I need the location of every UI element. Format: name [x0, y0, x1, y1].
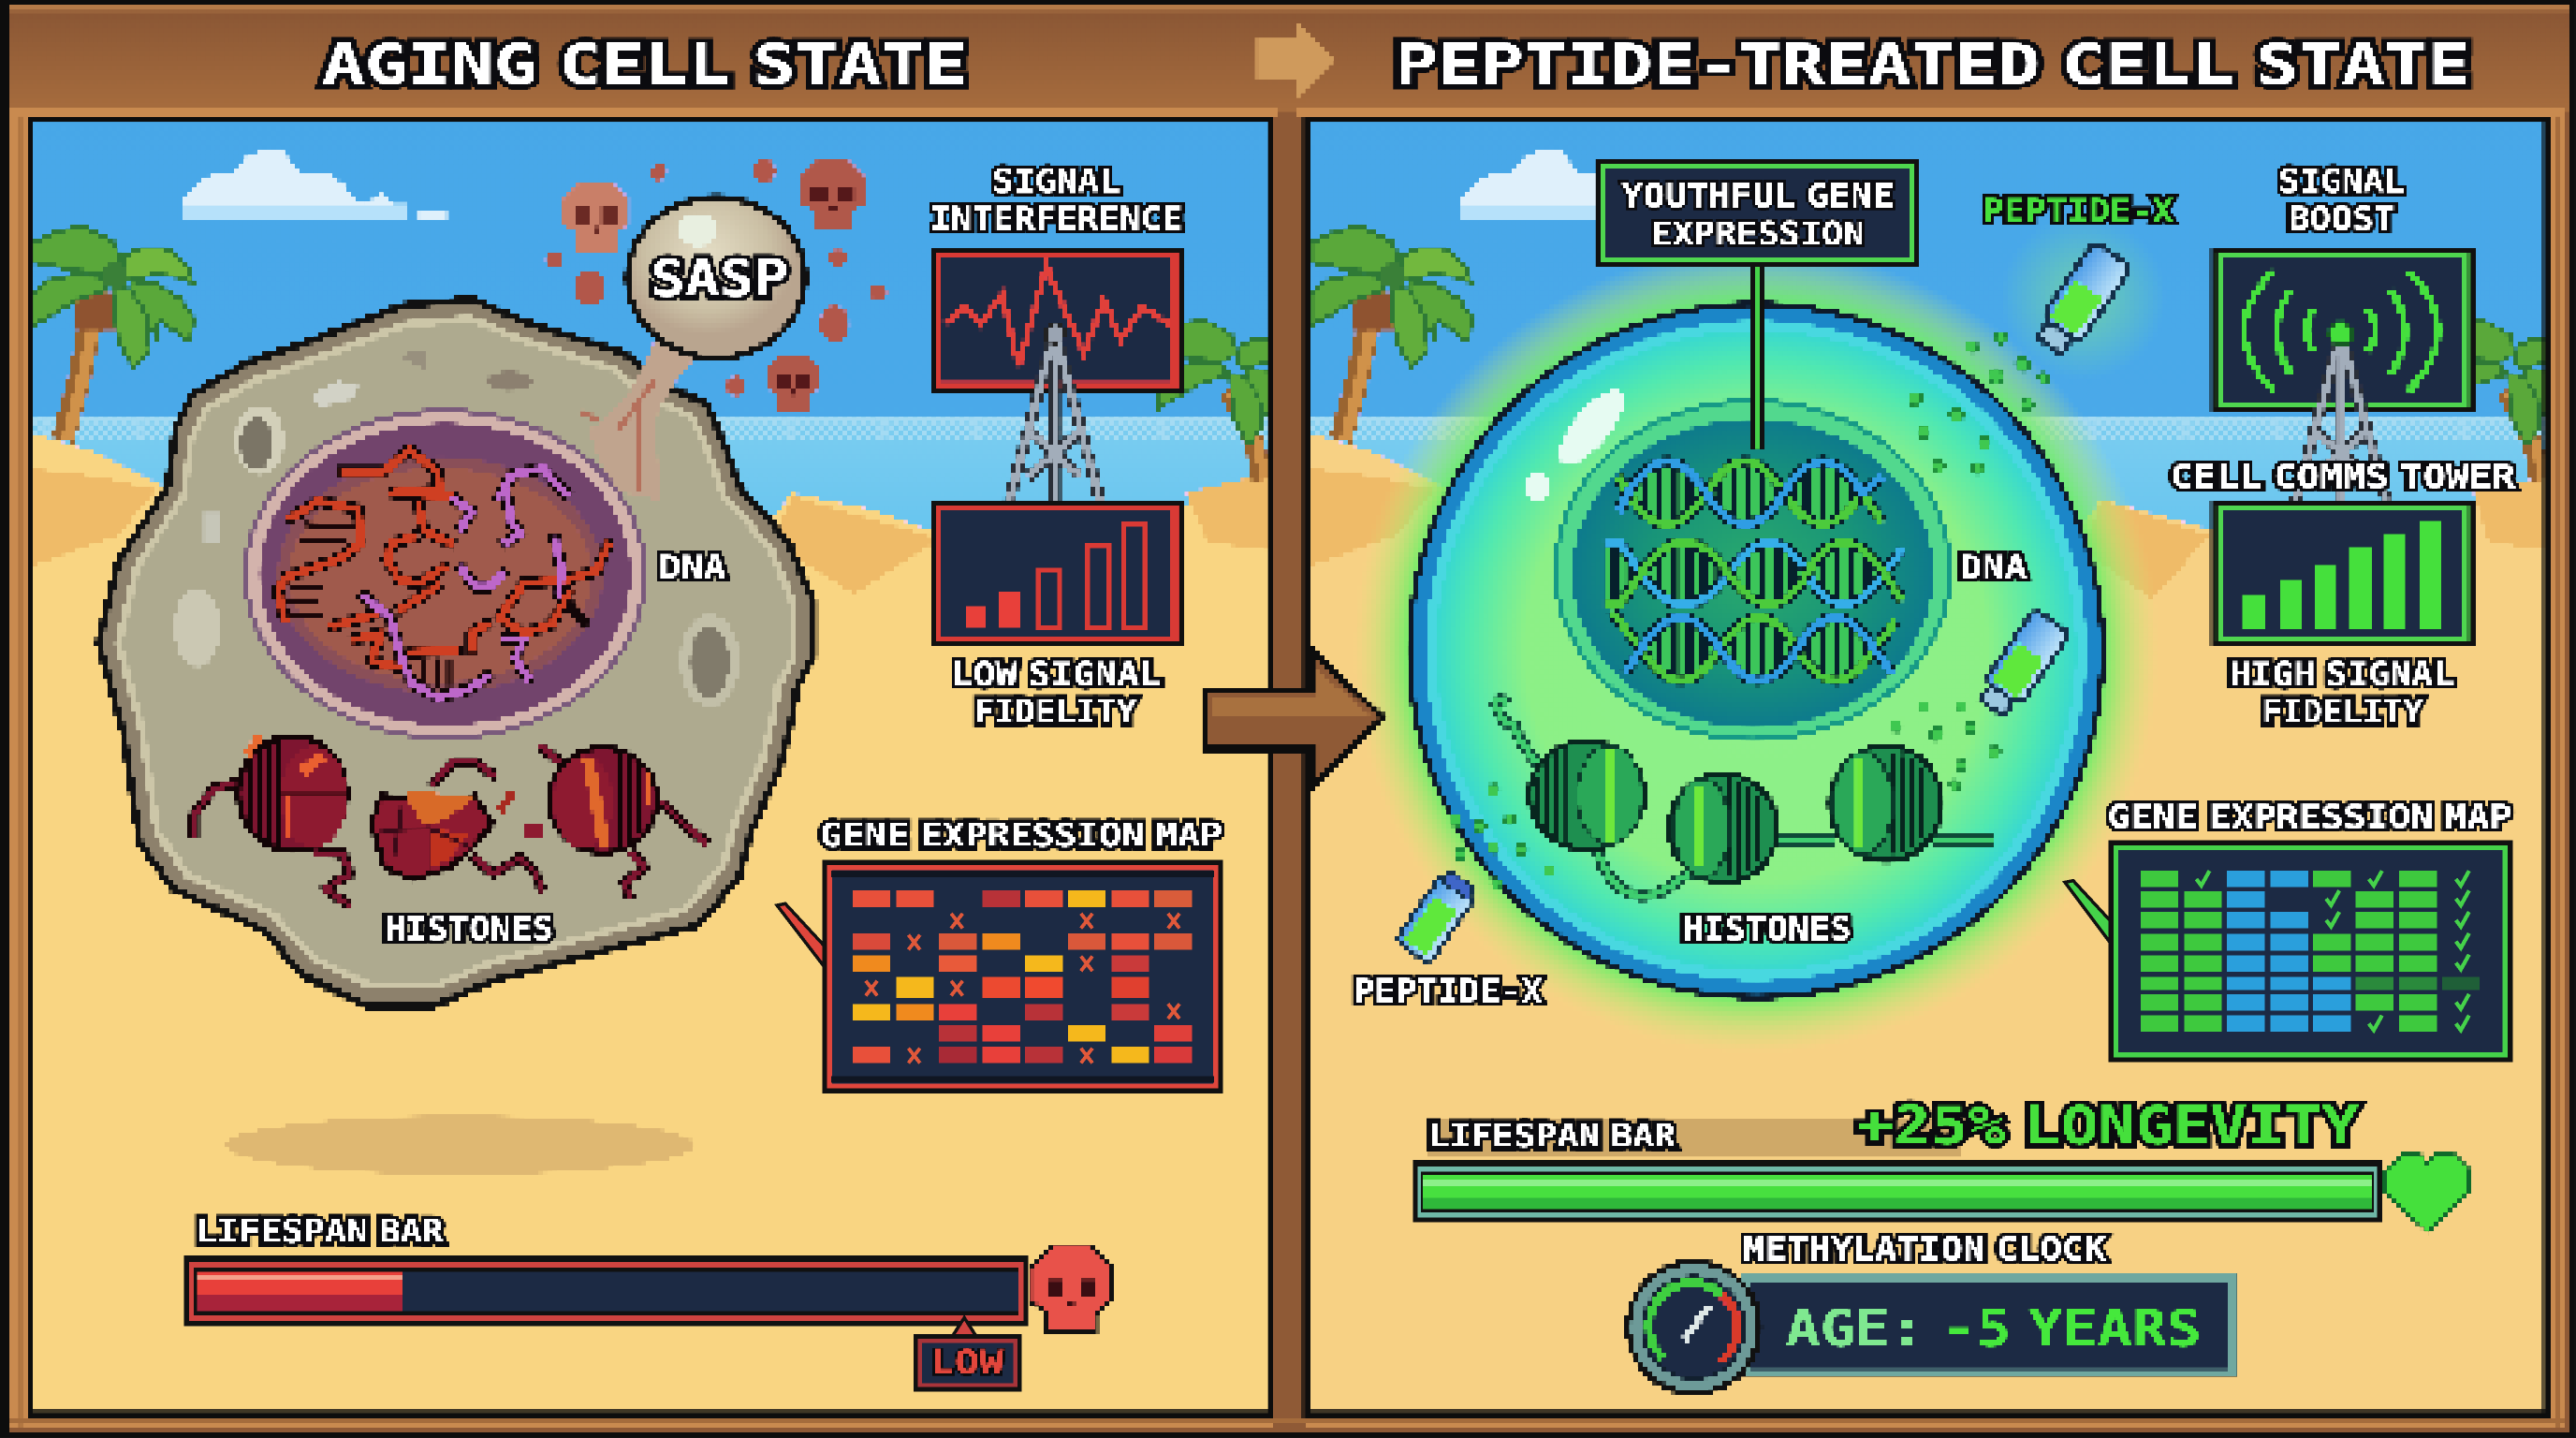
- low signal fidelity screen: [935, 503, 1179, 644]
- high signal fidelity label: [2230, 655, 2454, 731]
- lifespan bar low: [184, 1255, 1029, 1326]
- DNA label left: DNA: [659, 549, 726, 587]
- palm tree left: [33, 226, 194, 440]
- SASP stalk: [588, 342, 700, 501]
- gene map label left: GENE EXPRESSION MAP: [820, 816, 1222, 855]
- SASP skulls and particles: [546, 159, 887, 410]
- youthful gene expression text: YOUTHFUL GENE: [1621, 177, 1895, 215]
- skull end icon: [1030, 1245, 1110, 1331]
- cell highlights: [1526, 380, 1635, 501]
- title: aging: AGING CELL STATE: [322, 34, 968, 98]
- left desert background: [30, 120, 1268, 1418]
- youthful gene expression text: EXPRESSION: [1651, 214, 1865, 253]
- peptide-x green label: PEPTIDE-X: [1983, 192, 2174, 230]
- vacuoles: [174, 350, 739, 707]
- signal boost label: [2278, 162, 2405, 239]
- crisp data widgets: [184, 521, 2510, 1388]
- high signal fidelity bars: [2243, 521, 2441, 629]
- SASP label: SASP: [651, 249, 788, 308]
- low signal fidelity bars: [966, 524, 1145, 627]
- map cells right: [2141, 871, 2437, 1032]
- histones label right: HISTONES: [1682, 910, 1852, 948]
- methylation clock label: METHYLATION CLOCK: [1743, 1230, 2106, 1269]
- low tag text: LOW: [929, 1343, 1004, 1382]
- high signal fidelity label: FIDELITY: [2262, 693, 2423, 731]
- lifespan label left: LIFESPAN BAR: [196, 1212, 445, 1251]
- icon: vial top: [1969, 183, 2198, 412]
- title: treated: PEPTIDE-TREATED CELL STATE: [1395, 34, 2471, 98]
- high signal fidelity label: HIGH SIGNAL: [2230, 655, 2454, 694]
- panel: aging cell state: [30, 120, 1301, 1418]
- icon: vial middle: [1974, 609, 2071, 721]
- map cells left: [853, 890, 1192, 1063]
- damaged DNA: [278, 449, 607, 697]
- DNA label right: DNA: [1960, 549, 2027, 587]
- methylation gauge and readout: [1628, 1262, 2236, 1393]
- youthful gene expression box: [1597, 163, 1917, 265]
- gene expression map left: [777, 862, 1221, 1091]
- age readout: AGE: -5 YEARS: [1786, 1299, 2202, 1357]
- palm tree right: [1156, 318, 1268, 482]
- signal interference label: INTERFERENCE: [929, 200, 1183, 239]
- signal boost label: BOOST: [2289, 200, 2395, 239]
- panel: peptide-treated cell state: [1308, 120, 2576, 1418]
- low tag: [916, 1318, 1018, 1388]
- peptide particles: [1450, 332, 2048, 888]
- palm tree left: [1310, 226, 1471, 440]
- lifespan label right: LIFESPAN BAR: [1427, 1117, 1676, 1155]
- gene map label right: GENE EXPRESSION MAP: [2108, 799, 2511, 837]
- SASP bubble: [627, 198, 805, 359]
- healthy cell: [1354, 248, 2159, 1053]
- peptide-x white label: PEPTIDE-X: [1354, 973, 1543, 1011]
- histones label left: HISTONES: [385, 910, 553, 948]
- cell comms tower: [1009, 324, 1101, 503]
- signal boost screen: [2215, 250, 2471, 409]
- icon: vial bottom: [1395, 868, 1480, 964]
- healthy DNA helices: [1603, 462, 1902, 681]
- signal interference screen: [935, 250, 1179, 389]
- gene expression callout line: [1753, 263, 1763, 448]
- gene expression map right: [2065, 843, 2510, 1060]
- nucleus: [243, 408, 647, 741]
- low signal fidelity label: [951, 655, 1162, 731]
- youthful gene expression text: [1621, 177, 1895, 253]
- senescent cell: [98, 299, 813, 1005]
- signal interference label: SIGNAL: [992, 162, 1120, 200]
- longevity callout: +25% LONGEVITY: [1856, 1095, 2359, 1156]
- lifespan bar high: [1412, 1160, 2382, 1223]
- centre transition arrow: [1204, 653, 1383, 784]
- header arrow: [1257, 22, 1336, 97]
- right desert background: [1308, 120, 2550, 1418]
- cell comms tower label: CELL COMMS TOWER: [2170, 458, 2516, 496]
- palm tree right: [2437, 320, 2576, 479]
- cell comms tower: [2295, 322, 2387, 503]
- low signal fidelity label: LOW SIGNAL: [951, 655, 1162, 694]
- damaged histones: [194, 736, 708, 905]
- nucleus: [1556, 401, 1950, 740]
- icon: heart: [2385, 1153, 2469, 1232]
- healthy histones: [1497, 700, 1995, 895]
- high signal fidelity screen: [2215, 503, 2471, 644]
- low signal fidelity label: FIDELITY: [974, 693, 1136, 731]
- signal boost label: SIGNAL: [2278, 162, 2405, 200]
- signal interference label: [929, 162, 1183, 239]
